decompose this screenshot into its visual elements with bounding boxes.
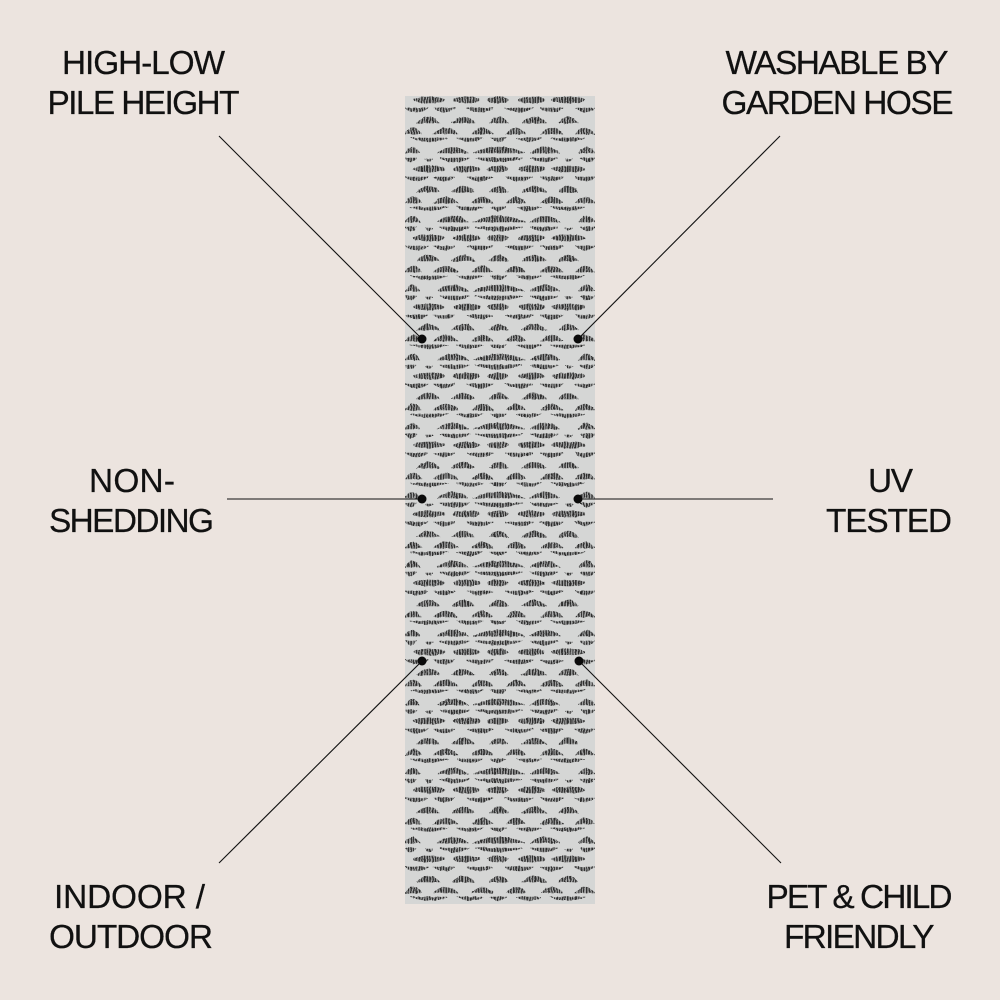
callout: pet and child friendly: PET & CHILD	[766, 879, 952, 916]
callout: high-low pile height	[48, 45, 426, 344]
callout: indoor / outdoor	[49, 656, 426, 956]
rug runner	[405, 96, 595, 904]
callout: pet and child friendly	[574, 656, 952, 956]
callout: non-shedding: NON-	[89, 463, 175, 500]
callout: pet and child friendly: FRIENDLY	[784, 919, 934, 956]
callout: high-low pile height: PILE HEIGHT	[48, 85, 240, 122]
callout: indoor / outdoor: OUTDOOR	[49, 919, 213, 956]
callout: uv tested	[574, 463, 952, 540]
callout: washable by garden hose: GARDEN HOSE	[722, 85, 954, 122]
callout: non-shedding	[49, 463, 426, 540]
callout: uv tested: TESTED	[826, 503, 952, 540]
callout: non-shedding: SHEDDING	[49, 503, 214, 540]
callout: high-low pile height: HIGH-LOW	[62, 45, 225, 82]
callout: washable by garden hose	[574, 45, 954, 344]
callout: uv tested: UV	[868, 463, 914, 500]
callout: indoor / outdoor: INDOOR /	[54, 879, 206, 916]
callout: washable by garden hose: WASHABLE BY	[726, 45, 948, 82]
